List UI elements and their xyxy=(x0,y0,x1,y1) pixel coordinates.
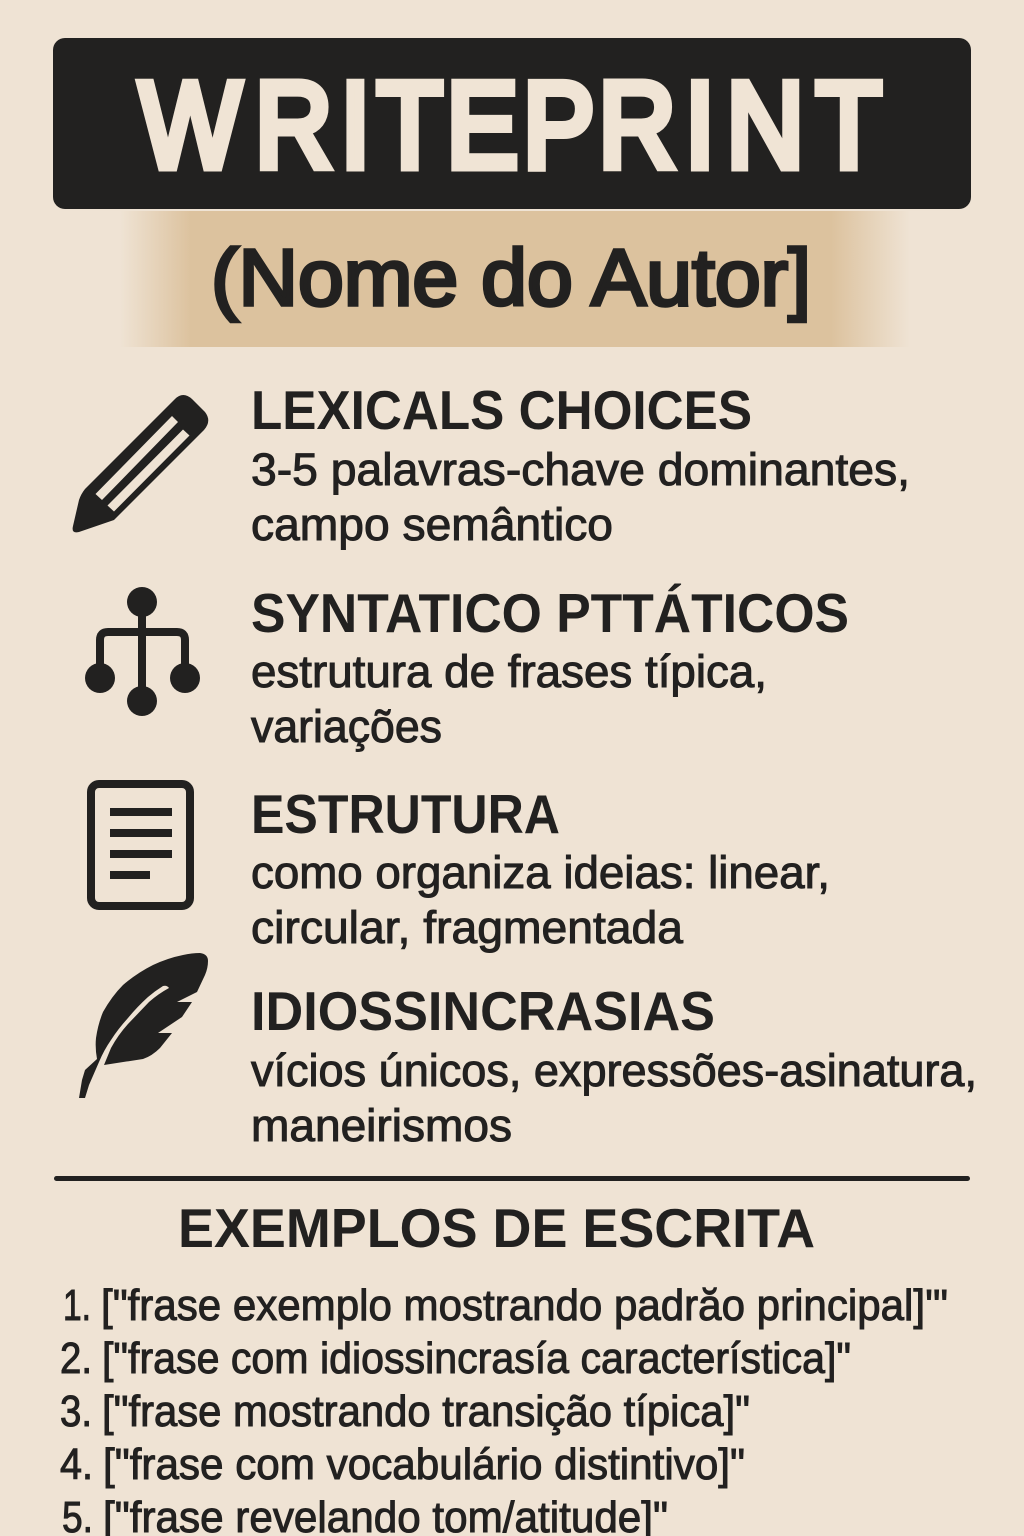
example 2: 2. xyxy=(60,1334,92,1383)
title text: WRITEPRINT xyxy=(139,58,882,194)
subtitle highlight band xyxy=(120,211,910,347)
example 1: 1. xyxy=(63,1281,91,1330)
icon: branching tree xyxy=(85,587,200,716)
title banner xyxy=(53,38,971,209)
example 3: 3. xyxy=(60,1387,92,1436)
example 3: ["frase mostrando transição típica]" xyxy=(102,1387,750,1436)
icon: feather quill xyxy=(79,953,208,1098)
heading: lexicals choices: LEXICALS CHOICES xyxy=(251,379,752,441)
description: structure: como organiza ideias: linear, xyxy=(251,847,830,898)
example 2: ["frase com idiossincrasía característica]" xyxy=(102,1334,851,1383)
description: syntactic patterns: variações xyxy=(251,701,442,752)
description: lexical choices: campo semântico xyxy=(251,499,613,550)
description: syntactic patterns: estrutura de frases típica, xyxy=(251,646,767,697)
description: idiosyncrasies: maneirismos xyxy=(251,1100,512,1151)
heading: idiossincrasias: IDIOSSINCRASIAS xyxy=(251,980,715,1042)
list: writing examples xyxy=(60,1281,948,1536)
description: syntactic patterns xyxy=(251,646,767,752)
example 1: ["frase exemplo mostrando padrăo principal]'" xyxy=(101,1281,948,1330)
description: lexical choices xyxy=(251,444,910,550)
description: idiosyncrasies: vícios únicos, expressões-asinatura, xyxy=(251,1045,977,1096)
example 4: 4. xyxy=(60,1440,93,1489)
heading: syntatico pttaticos: SYNTATICO PTTÁTICOS xyxy=(251,582,849,644)
description: structure xyxy=(251,847,830,953)
section: syntactic patterns xyxy=(85,582,849,752)
heading: writing examples: EXEMPLOS DE ESCRITA xyxy=(178,1197,815,1259)
section: structure xyxy=(91,783,830,953)
section: lexical choices xyxy=(73,379,910,550)
description: structure: circular, fragmentada xyxy=(251,902,684,953)
example 4: ["frase com vocabulário distintivo]" xyxy=(103,1440,745,1489)
heading: estrutura: ESTRUTURA xyxy=(251,783,560,845)
section: idiosyncrasies xyxy=(79,953,977,1151)
subtitle: author name: (Nome do Autor] xyxy=(211,233,811,322)
description: idiosyncrasies xyxy=(251,1045,977,1151)
icon: document xyxy=(91,784,190,906)
icon: pencil xyxy=(73,395,208,532)
description: lexical choices: 3-5 palavras-chave dominantes, xyxy=(251,444,910,495)
